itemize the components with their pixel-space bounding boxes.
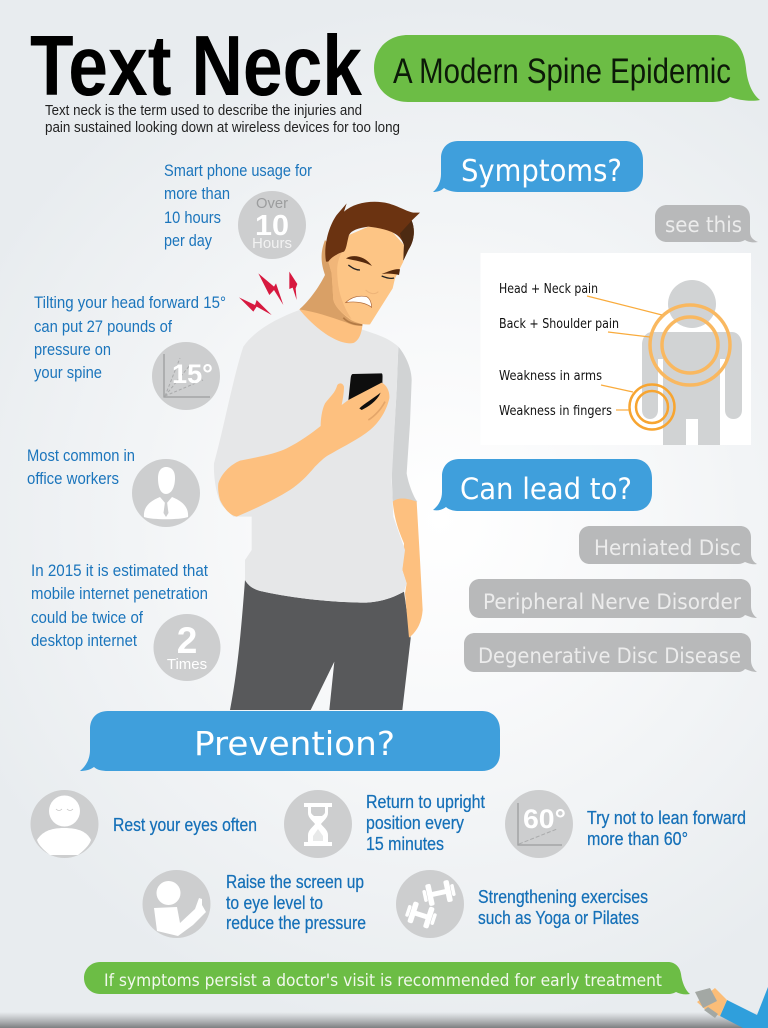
prevention: return to upright: [284, 790, 485, 858]
prevention: raise the screen: Raise the screen up: [226, 871, 364, 892]
symptom labels: Weakness in fingers: [499, 403, 612, 419]
stat: mobile internet text: [31, 561, 208, 650]
chin shadow: [343, 318, 362, 325]
stat: smart phone usage text: Smart phone usage for: [164, 161, 312, 180]
heading bubble: Symptoms: [433, 141, 643, 192]
icon: hand holding phone: [695, 987, 768, 1028]
lowered arm: [393, 499, 423, 638]
prevention: return to upright: Return to upright: [366, 791, 485, 812]
leader lines: [587, 296, 662, 410]
stat: mobile internet text: mobile internet penetration: [31, 584, 208, 603]
stat: tilting head text: can put 27 pounds of: [34, 317, 172, 336]
icon: over 10 hours: Over: [256, 195, 288, 212]
nose shadow: [366, 290, 378, 294]
pain rings: [630, 305, 730, 430]
subtitle bubble: A Modern Spine Epidemic: [374, 35, 760, 102]
prevention: rest your eyes: Rest your eyes often: [113, 814, 257, 835]
symptom labels: [499, 281, 619, 419]
shirt sleeve: [392, 347, 417, 502]
stat: office workers text: [27, 446, 135, 488]
bubble: Herniated Disc: Herniated Disc: [594, 536, 741, 560]
hand and forearm: [218, 383, 389, 517]
trousers: [230, 580, 411, 710]
bubble: Peripheral Nerve Disorder: Peripheral Nerve Disorder: [483, 590, 741, 614]
icon: 2 times: 2: [177, 620, 197, 661]
icon: hourglass: [284, 790, 352, 858]
stat: smart phone usage text: [164, 161, 312, 250]
prevention: strengthening exercises: such as Yoga or Pilates: [478, 907, 639, 928]
heading bubble: Prevention: [80, 711, 500, 771]
prevention: raise the screen: reduce the pressure: [226, 912, 366, 933]
stat: smart phone usage text: 10 hours: [164, 208, 221, 227]
prevention: raise the screen: [142, 870, 366, 938]
stat: mobile internet text: In 2015 it is estimated that: [31, 561, 208, 580]
stat: tilting head text: your spine: [34, 363, 102, 382]
cheek shading: [328, 253, 352, 319]
stat: tilting head text: pressure on: [34, 340, 111, 359]
icon: person pointing up: [142, 870, 210, 938]
stat: office workers text: office workers: [27, 469, 119, 488]
symptom labels: Back + Shoulder pain: [499, 316, 619, 332]
stat: smart phone usage text: more than: [164, 184, 230, 203]
symptom labels: Weakness in arms: [499, 368, 602, 384]
eyebrows and eyes: [346, 256, 372, 266]
prevention: raise the screen: to eye level to: [226, 892, 323, 913]
intro text: pain sustained looking down at wireless devices for too long: [45, 119, 400, 136]
intro text: [45, 102, 400, 136]
prevention: do not lean: more than 60°: [587, 828, 688, 849]
heading bubble: Prevention: Prevention?: [194, 724, 395, 763]
shirt: [214, 310, 407, 603]
callout: doctor visit bubble: [84, 962, 690, 994]
icon: dumbbells: [396, 870, 464, 938]
prevention: strengthening exercises: [396, 870, 648, 938]
icon: over 10 hours: Hours: [252, 235, 292, 252]
icon: 60 degrees: 60°: [523, 804, 566, 834]
bubble: see this: [655, 205, 758, 242]
prevention: return to upright: 15 minutes: [366, 833, 444, 854]
prevention: do not lean: Try not to lean forward: [587, 807, 746, 828]
prevention: do not lean: [505, 790, 746, 858]
face: [328, 227, 404, 324]
bubble: Degenerative Disc Disease: [464, 633, 757, 672]
heading bubble: Can lead to: [433, 459, 652, 511]
prevention: rest your eyes: [30, 790, 257, 858]
symptom labels: Head + Neck pain: [499, 281, 598, 297]
prevention: strengthening exercises: Strengthening exercises: [478, 886, 648, 907]
bubble: Herniated Disc: [579, 526, 757, 564]
panel: symptom body diagram: [480, 253, 751, 445]
phone: [348, 373, 383, 401]
hair: [325, 202, 420, 262]
icon: 60 degrees: [505, 790, 573, 858]
chest skin: [299, 300, 363, 343]
pain lightning bolts: [239, 272, 297, 315]
callout: doctor visit bubble: If symptoms persist a doctor's visit is recommended for early treatment: [104, 971, 662, 990]
prevention: return to upright: position every: [366, 812, 465, 833]
neck shadow: [299, 240, 363, 326]
icon: 2 times: [154, 614, 220, 681]
stat: tilting head text: [34, 293, 226, 382]
icon: over 10 hours: [238, 191, 306, 259]
heading bubble: Symptoms: Symptoms?: [461, 154, 622, 189]
heading bubble: Can lead to: Can lead to?: [460, 472, 632, 506]
icon: over 10 hours: 10: [255, 210, 289, 242]
icon: office worker: [132, 459, 200, 527]
icon: 15 degrees: 15°: [172, 359, 213, 389]
stat: smart phone usage text: per day: [164, 231, 212, 250]
icon: 15 degrees: [152, 342, 220, 410]
intro text: Text neck is the term used to describe the injuries and: [45, 102, 362, 119]
bubble: Peripheral Nerve Disorder: [469, 579, 757, 618]
stat: tilting head text: Tilting your head forward 15°: [34, 293, 226, 312]
figure silhouette: [642, 280, 742, 445]
icon: 2 times: Times: [167, 656, 207, 673]
stat: mobile internet text: could be twice of: [31, 608, 143, 627]
grimacing mouth: [346, 296, 372, 307]
bubble: Degenerative Disc Disease: Degenerative Disc Disease: [478, 644, 741, 668]
icon: resting face: [30, 790, 98, 858]
illustration: man looking at phone: [214, 202, 423, 710]
bubble: see this: see this: [665, 213, 742, 237]
title: Text Neck: [30, 19, 363, 114]
stat: mobile internet text: desktop internet: [31, 631, 137, 650]
stat: office workers text: Most common in: [27, 446, 135, 465]
